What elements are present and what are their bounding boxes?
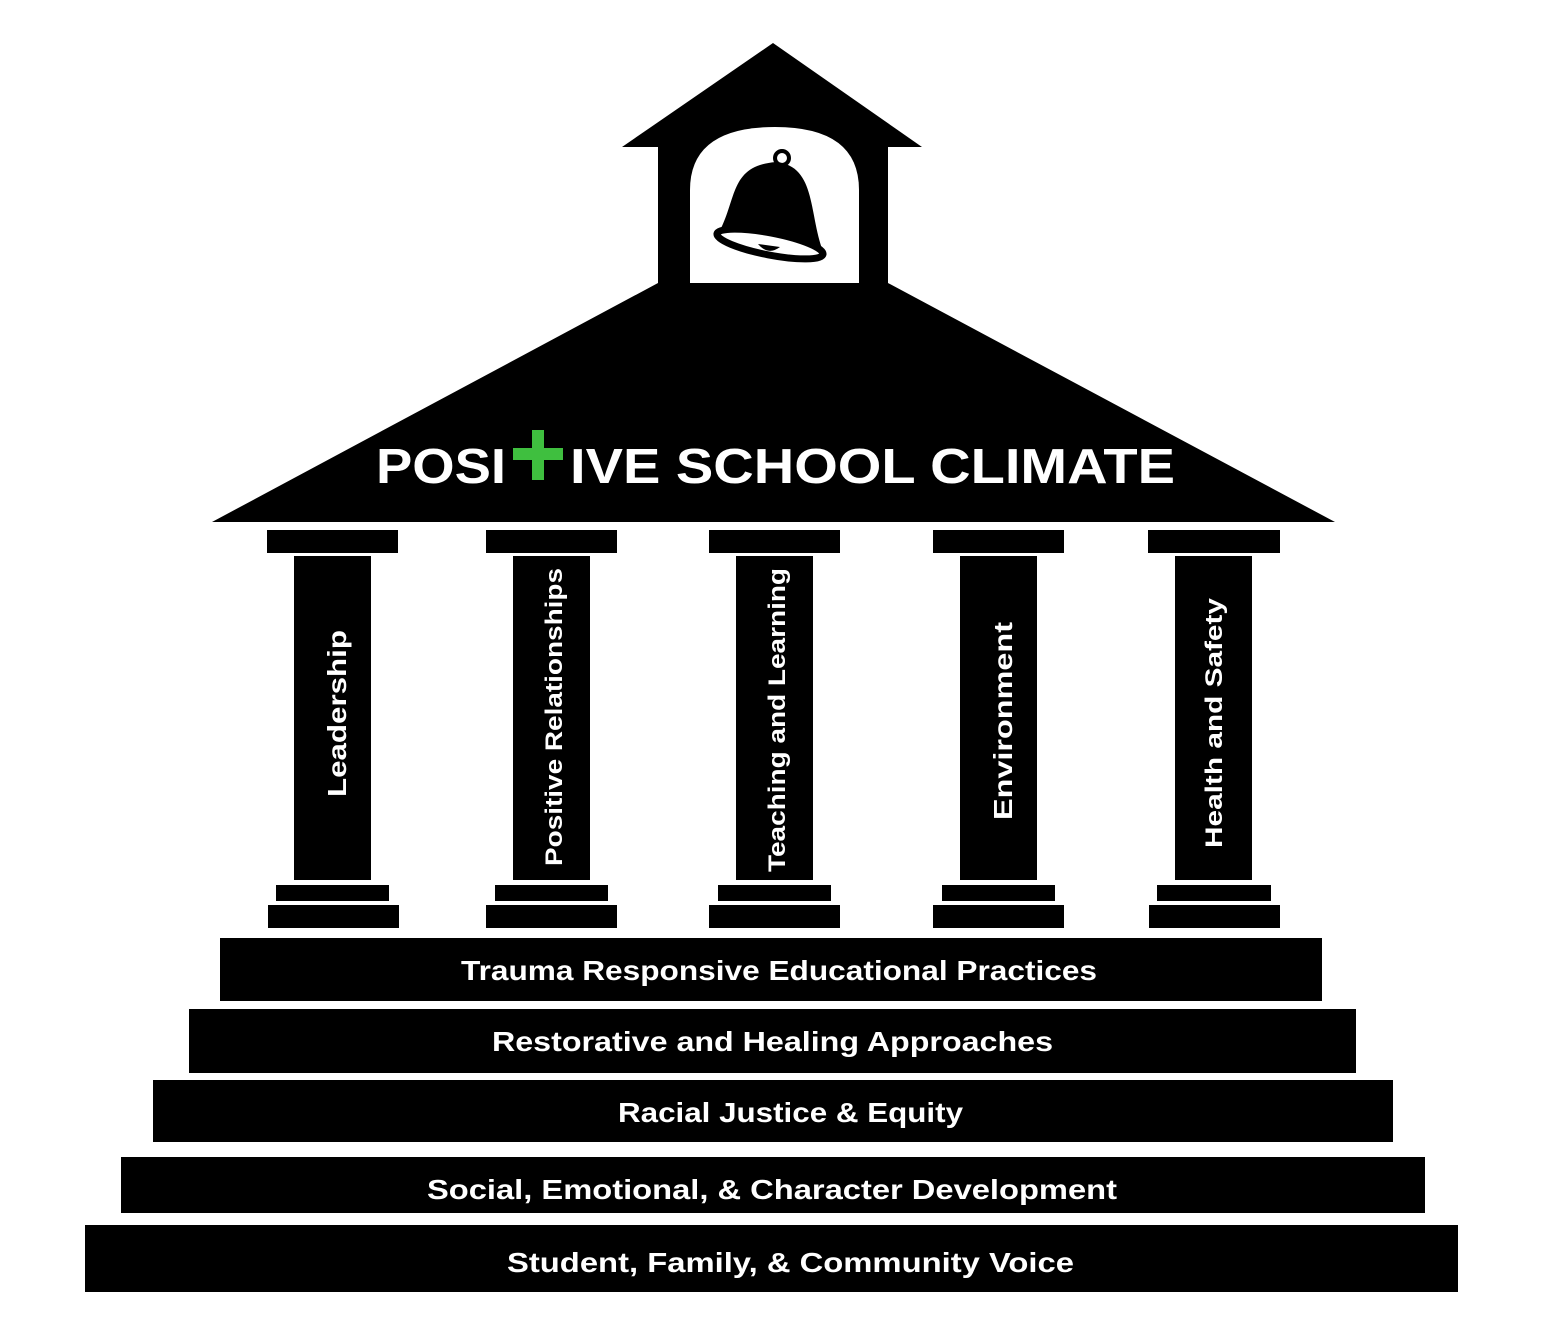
pillar: Environment (933, 530, 1064, 928)
step: Social, Emotional, & Character Development (121, 1157, 1425, 1213)
step: Trauma Responsive Educational Practices: Trauma Responsive Educational Practices (461, 955, 1097, 986)
title: POSI (376, 440, 506, 494)
pillar: Teaching and Learning: Teaching and Learning (764, 568, 791, 872)
pillar: Positive Relationships (486, 530, 617, 928)
pillar: Leadership: Leadership (322, 630, 352, 797)
pillar: Health and Safety (1148, 530, 1280, 928)
step: Racial Justice & Equity (153, 1080, 1393, 1142)
step: Student, Family, & Community Voice (85, 1225, 1458, 1292)
roof: school building roof with bell tower (212, 43, 1335, 522)
step: Restorative and Healing Approaches (189, 1009, 1356, 1073)
pillar: Health and Safety: Health and Safety (1201, 597, 1228, 848)
step: Trauma Responsive Educational Practices (220, 938, 1322, 1001)
step: Restorative and Healing Approaches: Restorative and Healing Approaches (492, 1026, 1053, 1057)
title (376, 430, 1175, 494)
icon: green plus (513, 430, 563, 480)
pillar: Teaching and Learning (709, 530, 840, 928)
step: Racial Justice & Equity: Racial Justice & Equity (618, 1097, 963, 1128)
step: Student, Family, & Community Voice: Student, Family, & Community Voice (507, 1247, 1074, 1278)
pillar: Environment: Environment (988, 622, 1018, 820)
step: Social, Emotional, & Character Development: Social, Emotional, & Character Development (427, 1174, 1117, 1205)
title: IVE SCHOOL CLIMATE (570, 440, 1175, 494)
icon: bell (715, 151, 825, 265)
pillar: Leadership (267, 530, 399, 928)
pillar: Positive Relationships: Positive Relationships (541, 568, 568, 866)
